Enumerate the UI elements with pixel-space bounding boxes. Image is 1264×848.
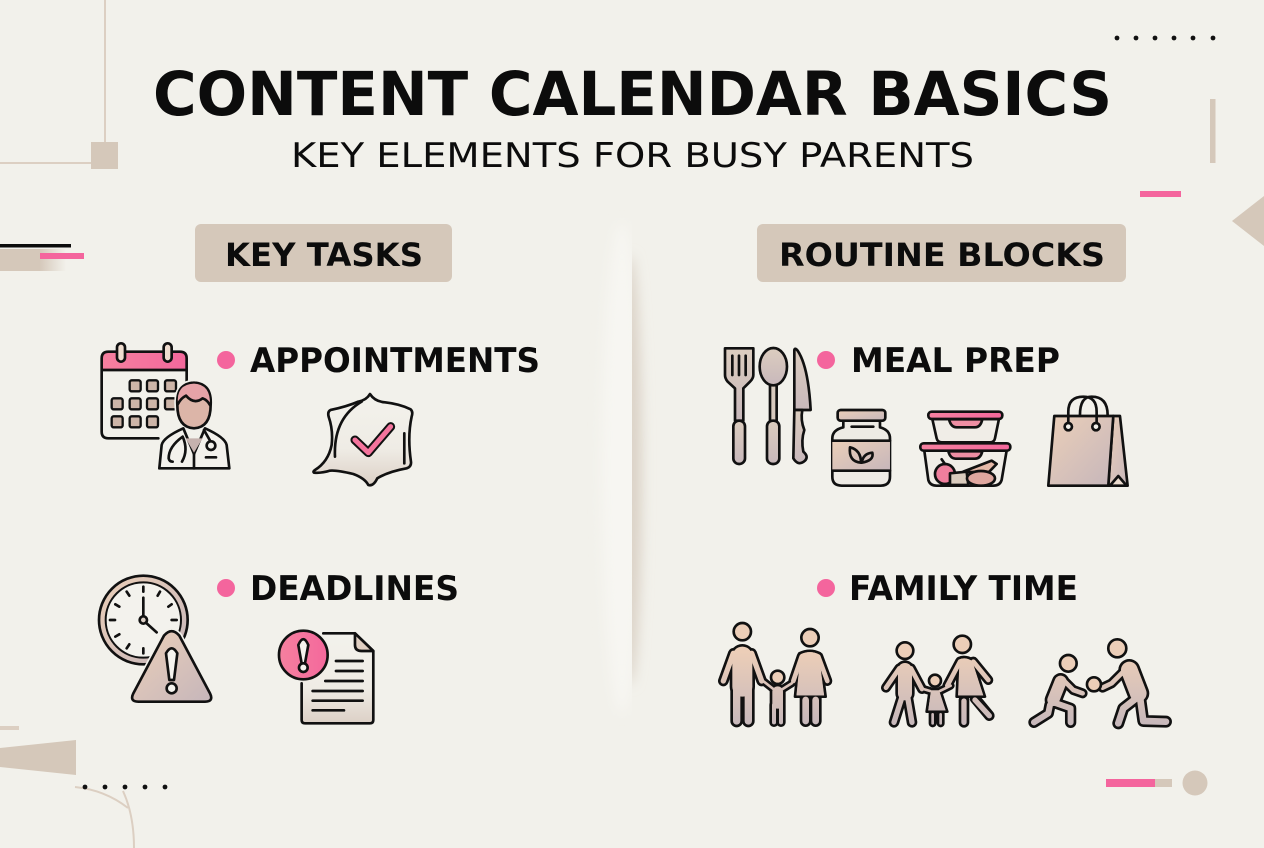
icon: family walking [886,636,989,723]
title: CONTENT CALENDAR BASICS [153,59,1112,130]
center divider fold [632,259,646,681]
item: family time label: FAMILY TIME [849,569,1078,609]
icon: jar [832,410,890,486]
icon: shopping bag [1048,397,1128,486]
heading: routine blocks: ROUTINE BLOCKS [779,236,1105,274]
decoration: top right dots [1115,36,1215,40]
heading: routine blocks [757,224,1126,282]
item: appointments label: APPOINTMENTS [250,341,540,381]
icon: parent and child playing ball [1034,639,1166,723]
icon: calendar with doctor [102,343,229,468]
decoration: bottom left shapes [0,726,167,848]
decoration: left bars [0,244,84,271]
heading: key tasks: KEY TASKS [225,236,423,274]
item: meal prep label: MEAL PREP [851,341,1060,381]
icon: family standing [723,623,827,722]
icon: check badge [313,394,412,485]
decoration: bottom right bar and circle [1106,770,1208,796]
subtitle: KEY ELEMENTS FOR BUSY PARENTS [291,136,974,176]
decoration: right shapes [1140,99,1264,246]
heading: key tasks [195,224,452,282]
icon: kitchen utensils [725,348,811,464]
icon: food containers [920,412,1010,486]
icon: clock with warning triangle [99,576,211,702]
item: deadlines label: DEADLINES [250,569,459,609]
icon: alert document [279,631,373,723]
decoration: top left lines and square [0,0,118,169]
